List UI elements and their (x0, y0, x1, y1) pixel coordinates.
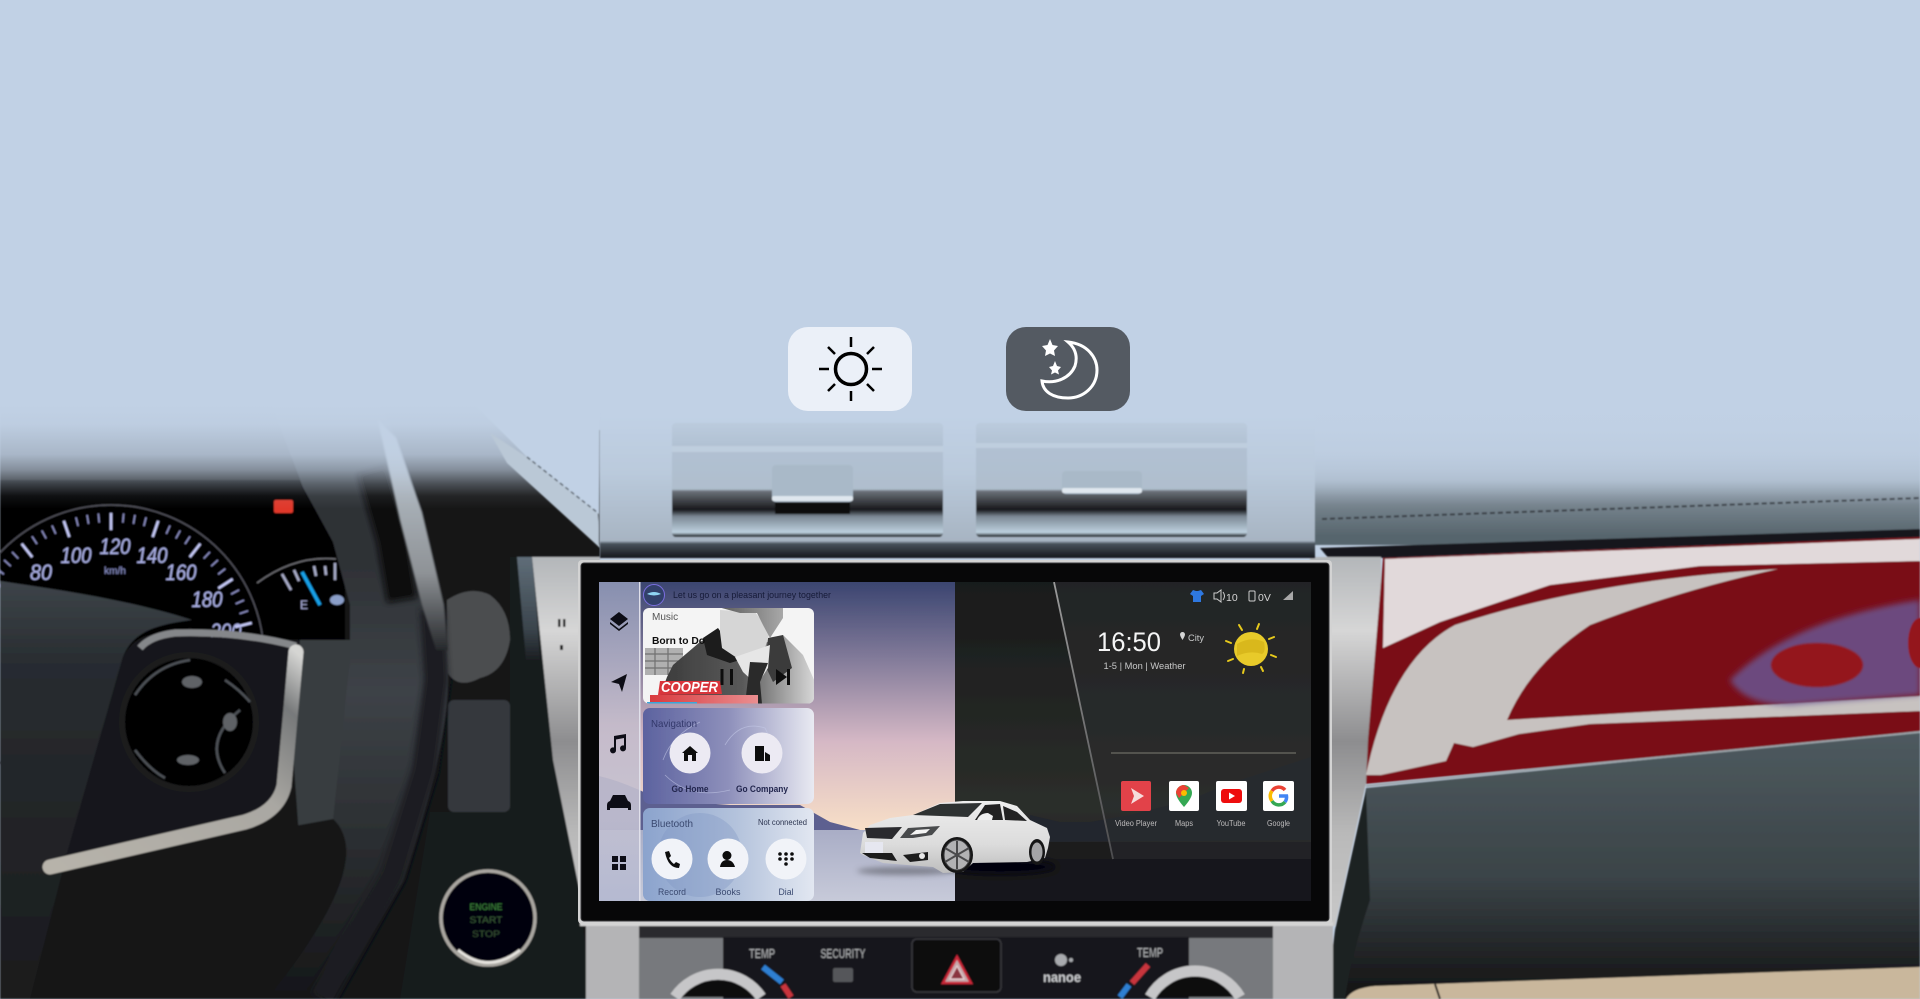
day half background (599, 582, 955, 830)
icon: grid (612, 856, 626, 870)
hazard triangle inner (950, 966, 964, 979)
sun shine (1237, 639, 1265, 656)
avatar line (647, 592, 661, 596)
black panel (723, 937, 1189, 999)
fuel arc (257, 558, 336, 583)
headlight lens (910, 829, 930, 835)
dark recess (639, 926, 1273, 938)
bezel shadow (1326, 790, 1370, 999)
icon: layers (610, 612, 628, 631)
buildings (645, 648, 683, 675)
shirt (735, 645, 770, 678)
upper dash right (1300, 400, 1920, 545)
icon: phone (665, 851, 680, 868)
hazard triangle (943, 957, 971, 983)
right dial (1150, 971, 1240, 997)
date: 1-5 | Mon | Weather (1104, 661, 1186, 672)
speedometer ticks (0, 513, 252, 627)
google label: Google (1267, 819, 1290, 828)
cooper red label (658, 681, 722, 695)
knob button marks (177, 676, 237, 765)
car dashboard scene (0, 327, 1920, 999)
rim (266, 400, 448, 999)
lower spoke (30, 819, 346, 999)
youtube play (1229, 792, 1235, 800)
connection status: Not connected (758, 818, 807, 827)
books label: Books (716, 887, 741, 898)
left dial (675, 974, 761, 997)
dashboard photo (0, 400, 1920, 999)
blue grey strip (517, 557, 540, 660)
face (720, 610, 770, 660)
video player app (1121, 781, 1151, 811)
nanoe label: nanoe (1043, 969, 1081, 985)
icon: speaker (1214, 590, 1224, 602)
night panel (1054, 582, 1311, 859)
car (857, 801, 1055, 875)
speedometer numbers (30, 534, 242, 644)
go home label: Go Home (672, 784, 708, 794)
climate labels: SECURITY (820, 946, 866, 961)
speedometer numbers: 200 (210, 619, 242, 644)
rear wheel (1029, 839, 1045, 865)
climate labels (749, 945, 1163, 961)
volume value: 10 (1226, 592, 1238, 604)
assistant avatar (644, 584, 664, 606)
maps pin top (1176, 785, 1189, 798)
warning lamp (274, 500, 293, 513)
right grain spot (1908, 618, 1920, 668)
climate panel (580, 922, 1333, 999)
dial button (766, 838, 806, 880)
record label: Record (658, 887, 686, 898)
nanoe logo (1043, 954, 1081, 985)
headlight (900, 826, 940, 838)
panel: navigation card (643, 708, 814, 804)
button labels (470, 902, 503, 940)
bluetooth background (643, 808, 814, 901)
speedometer numbers: 100 (60, 543, 92, 568)
city pin (1180, 632, 1185, 640)
left collar (703, 628, 740, 663)
number plate (865, 842, 883, 853)
front wheel spokes (945, 841, 969, 869)
base dark cabin (0, 400, 600, 999)
left vent (672, 423, 943, 537)
steering wheel (0, 400, 448, 999)
speedometer numbers: 180 (192, 587, 223, 612)
chrome top (140, 633, 296, 648)
go company button (742, 732, 782, 774)
front wheel (941, 837, 973, 873)
google app (1263, 781, 1294, 811)
engine start button (441, 871, 535, 965)
dash trim near vents (470, 400, 600, 548)
centre bezel right (1310, 557, 1381, 926)
right vent knob (1062, 471, 1142, 494)
sky area above trim (470, 400, 600, 515)
day mode button (788, 327, 912, 411)
grille (865, 827, 902, 839)
rim outer dark edge (322, 610, 436, 999)
tie (745, 662, 768, 704)
maps app (1169, 781, 1199, 811)
control plate (55, 635, 300, 860)
speedometer outer arc (0, 505, 264, 811)
maps pin (1176, 785, 1192, 807)
fuel gauge (257, 558, 344, 612)
left vent knob (772, 465, 853, 502)
night half background (955, 582, 1311, 842)
rim black band (372, 470, 402, 600)
panel: music card (643, 607, 815, 704)
icon: weather sun (1226, 624, 1276, 673)
icon: shirt (1190, 590, 1204, 602)
google glyph (1270, 787, 1287, 805)
city: City (1188, 633, 1205, 643)
stalk knob (447, 591, 510, 683)
diagonal divider (1054, 582, 1113, 859)
video player glyph (1131, 788, 1144, 804)
speedometer numbers: 140 (136, 543, 168, 568)
button labels: STOP (472, 929, 500, 940)
album photo (645, 607, 815, 704)
pump icon (330, 595, 344, 605)
music background (643, 608, 814, 704)
grey blocks (639, 938, 1273, 999)
icon: moon (1042, 342, 1097, 398)
record button (652, 838, 692, 880)
youtube app (1216, 781, 1247, 811)
screen (599, 582, 1311, 901)
fuel needle (302, 572, 320, 605)
video player label: Video Player (1115, 819, 1157, 828)
unit label: km/h (104, 566, 126, 577)
left knob lip (772, 496, 853, 501)
button ring (441, 871, 535, 965)
seam line (599, 430, 600, 545)
nanoe dot (1069, 958, 1073, 962)
right vent top line (976, 443, 1247, 448)
silver sides (586, 922, 1333, 999)
column surround (400, 557, 590, 999)
car body (860, 801, 1050, 873)
rear wheel hub (1032, 842, 1042, 862)
icon: star small (1049, 361, 1061, 374)
icon: car (607, 795, 631, 810)
status bar (1190, 590, 1293, 604)
top bar (580, 922, 1333, 926)
fog lamp recess (903, 852, 928, 862)
windshield (913, 803, 982, 817)
hazard button (912, 939, 1001, 992)
lower red band (650, 695, 758, 704)
left scale red (783, 985, 791, 997)
outer silver edge (578, 560, 1332, 924)
left vent knob shadow (775, 502, 850, 514)
books button (708, 838, 748, 880)
control knob (122, 655, 256, 789)
rim highlight (378, 420, 448, 650)
head unit (578, 560, 1332, 924)
car shadow right (945, 860, 1055, 874)
icon: contacts (720, 851, 735, 867)
icon: pause (720, 669, 733, 685)
chrome trim (50, 652, 296, 867)
climate labels: TEMP (749, 946, 775, 961)
youtube label: YouTube (1216, 819, 1246, 828)
stitching (1322, 498, 1920, 519)
icon: navigation arrow (611, 674, 627, 692)
icon: star large (1042, 339, 1058, 356)
front side window (975, 804, 1003, 820)
beige carpet (1346, 967, 1920, 999)
top fade (0, 405, 1920, 535)
hub (0, 581, 192, 999)
sidebar (599, 582, 640, 901)
grey reflection (1366, 569, 1920, 775)
right scale red (1132, 965, 1148, 983)
greeting: Let us go on a pleasant journey together (673, 590, 831, 601)
top fade cover (0, 0, 1920, 406)
navigation label: Navigation (651, 718, 697, 730)
cooper text: COOPER (661, 679, 718, 696)
spoke connection (285, 640, 370, 850)
front wheel hub (944, 840, 970, 870)
navigation background (643, 708, 814, 804)
progress bar (647, 702, 697, 704)
go company label: Go Company (736, 784, 788, 794)
panel reflection floor (955, 859, 1311, 901)
panel: bluetooth card (643, 808, 814, 901)
button labels: START (470, 915, 503, 926)
night mode button (1006, 327, 1130, 411)
icon: keypad (778, 852, 794, 866)
dash lip (1366, 732, 1920, 786)
divider line (1111, 752, 1296, 754)
left scale arcs (763, 967, 782, 982)
wood trim (1366, 537, 1920, 784)
bluetooth label: Bluetooth (651, 818, 693, 830)
sidebar edge (639, 582, 640, 901)
mirror (977, 813, 993, 820)
white reflection (1383, 539, 1920, 648)
ring highlight (458, 950, 520, 962)
day button tile (788, 327, 912, 411)
faded circle (658, 813, 742, 897)
icon: battery (1249, 591, 1255, 601)
lower intake (862, 853, 897, 861)
carpet seam (1435, 984, 1440, 999)
bezel marks (558, 619, 566, 650)
button labels: ENGINE (470, 902, 502, 913)
climate labels: TEMP (1137, 945, 1163, 960)
music label: Music (652, 612, 678, 623)
youtube badge (1221, 789, 1242, 803)
clock: 16:50 (1097, 627, 1161, 657)
housing body (600, 415, 1315, 558)
grain spot (1771, 643, 1863, 687)
black frame (581, 563, 1329, 921)
centre bezel left (532, 557, 600, 926)
fuel ticks (282, 563, 335, 590)
map lines (663, 722, 769, 793)
instrument cluster (0, 480, 345, 811)
lock icon (833, 968, 853, 982)
icon: home (682, 746, 698, 761)
nanoe mark (1055, 954, 1067, 966)
sidebar icons (607, 612, 631, 870)
song title: Born to Do (652, 635, 705, 647)
icon: next (776, 669, 790, 685)
icon: sun (819, 337, 882, 401)
empty mark: E (300, 598, 308, 612)
cluster black (0, 480, 345, 710)
dash shadow seam (1320, 529, 1920, 560)
knob arcs (135, 660, 250, 778)
lower dash (1335, 732, 1920, 999)
rear side window (1003, 806, 1027, 821)
wood base (1366, 537, 1920, 784)
right knob lip (1062, 488, 1142, 493)
night floor (955, 842, 1311, 901)
speedometer numbers: 160 (166, 560, 197, 585)
app icons (1115, 781, 1294, 828)
speedometer numbers: 80 (30, 560, 53, 585)
dial label: Dial (778, 887, 794, 898)
icon: signal (1283, 591, 1293, 600)
vent housing (600, 415, 1315, 558)
day ground (640, 830, 955, 901)
stitches (527, 457, 598, 513)
car shadow left (857, 867, 953, 875)
right collar (765, 635, 792, 682)
building stripes (645, 648, 683, 675)
column panel (448, 700, 510, 812)
night button tile (1006, 327, 1130, 411)
light trim strip (490, 433, 600, 548)
right vent (976, 423, 1247, 537)
avatar ring (644, 584, 664, 606)
speedometer numbers: 120 (100, 534, 131, 559)
maps pin centre (1181, 790, 1187, 796)
sun rays (1226, 624, 1276, 673)
fog lamp (919, 853, 925, 859)
blue reflection (1730, 600, 1920, 705)
day hills (599, 776, 860, 830)
night hills (1030, 757, 1311, 842)
voltage value: 0V (1258, 592, 1271, 604)
right scale blue (1120, 985, 1129, 997)
jacket (657, 632, 815, 704)
go home button (670, 732, 710, 774)
maps label: Maps (1175, 819, 1193, 828)
icon: buildings (755, 746, 770, 761)
icon: music note (610, 734, 626, 753)
hair (718, 607, 783, 638)
left vent top line (672, 446, 943, 452)
sun disc (1234, 632, 1268, 666)
